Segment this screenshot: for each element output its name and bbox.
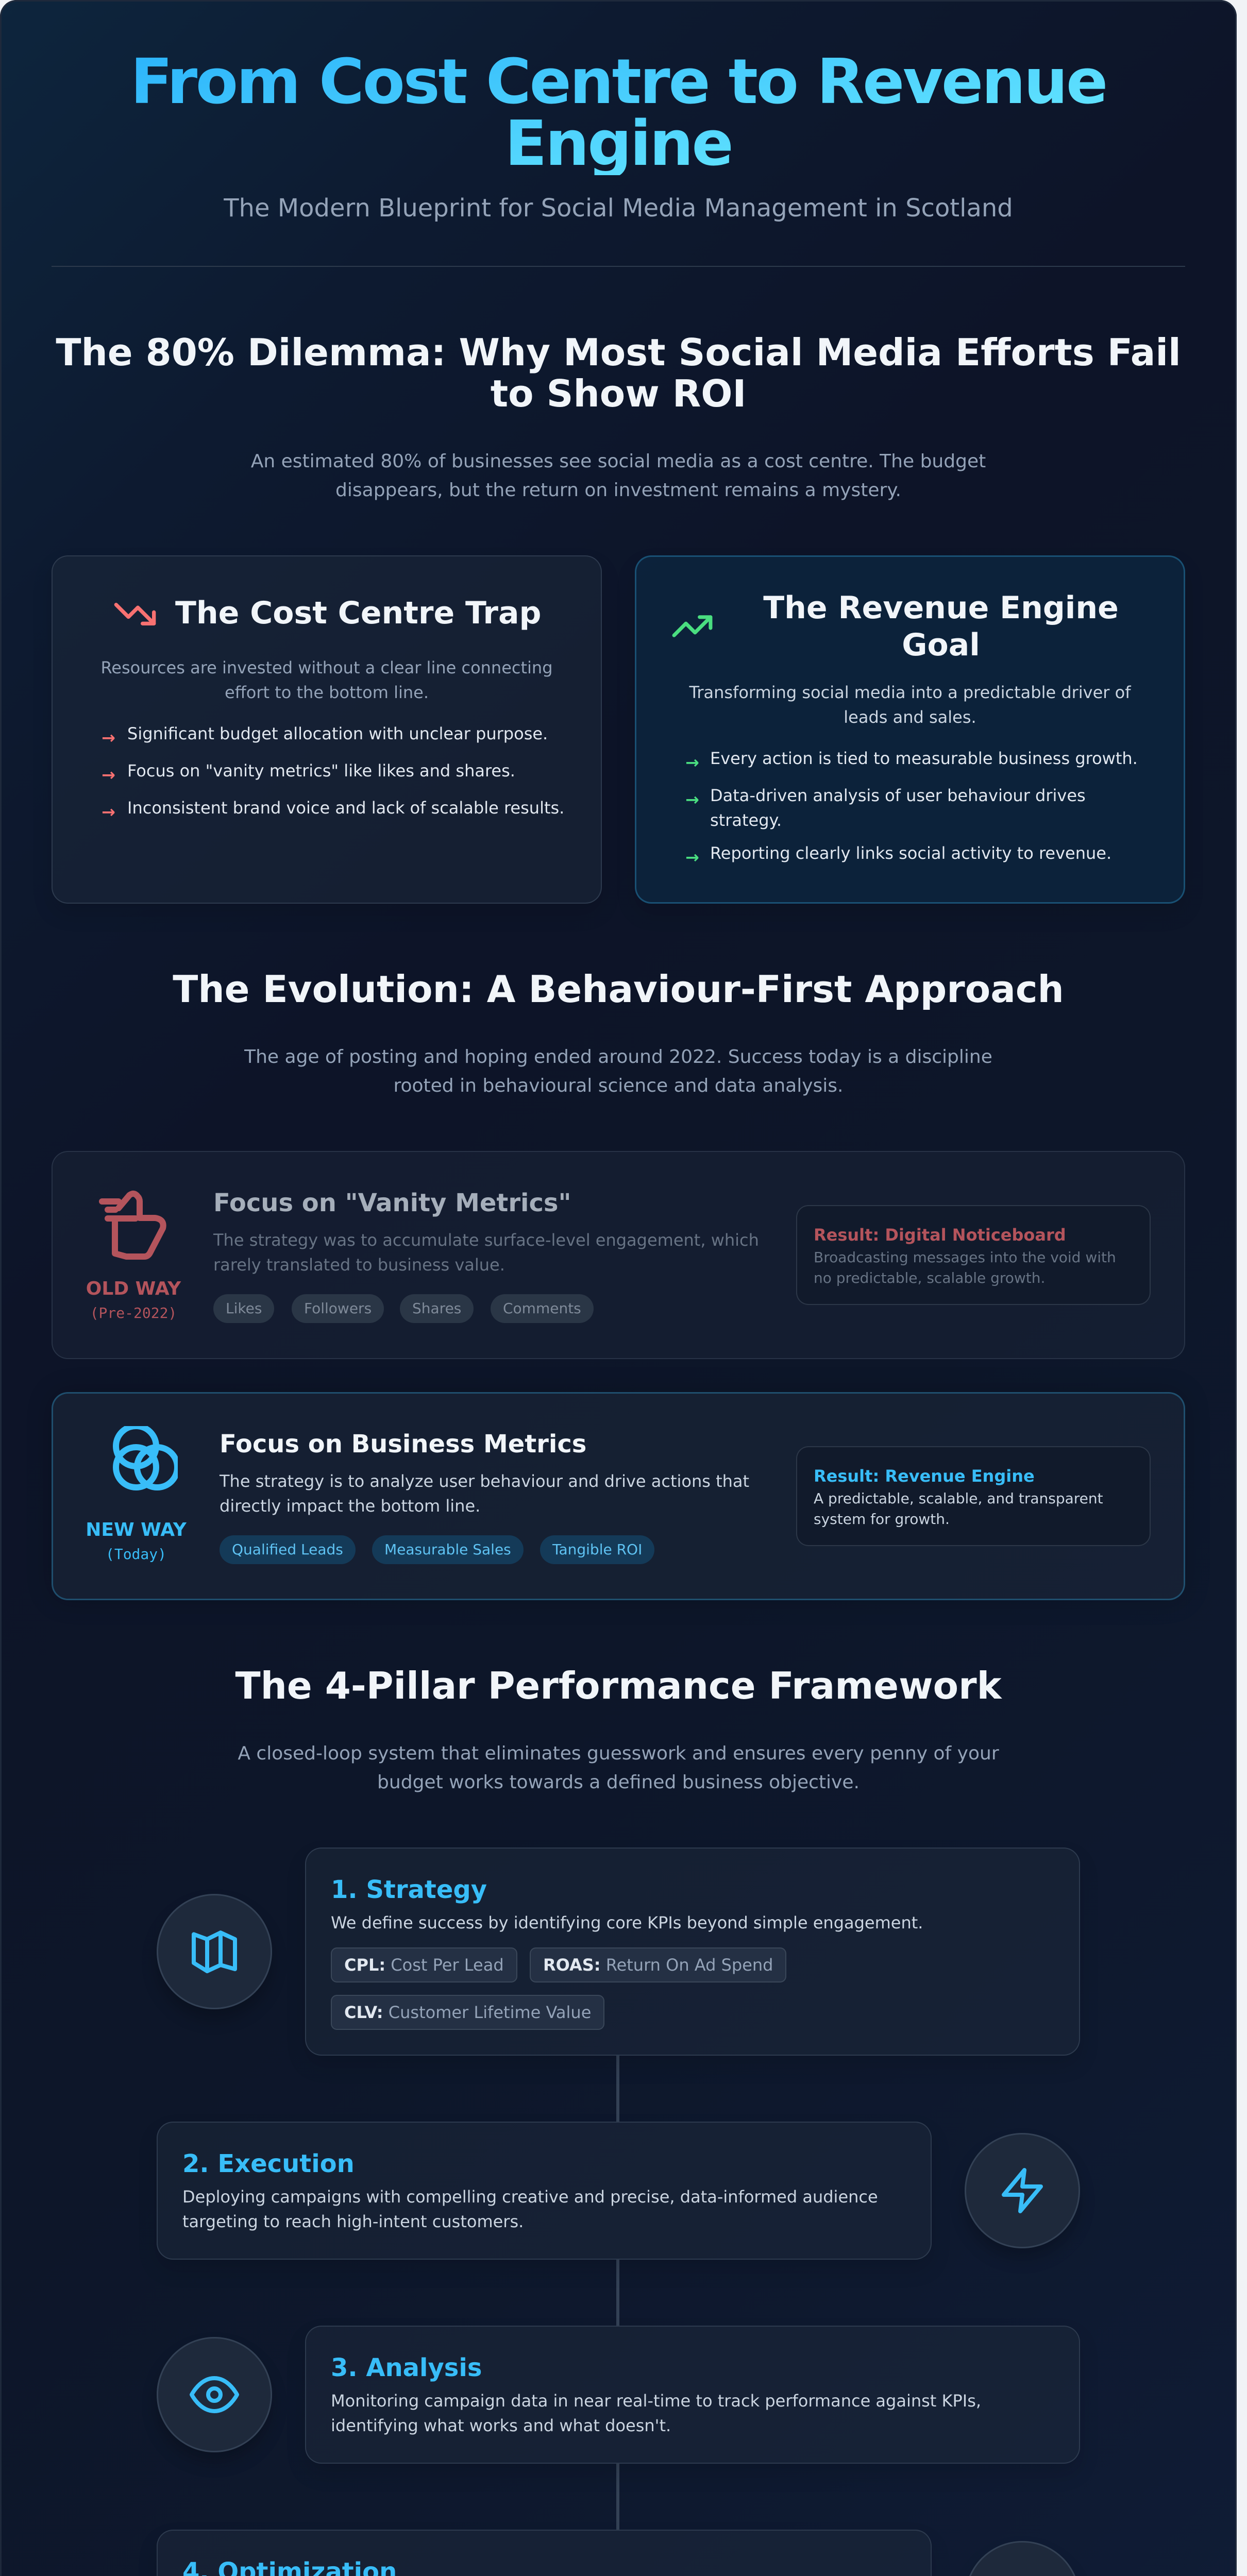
description bbox=[689, 683, 1132, 727]
tags: business metrics: Measurable Sales bbox=[384, 1541, 511, 1558]
heading: strategy: 1. Strategy bbox=[331, 1875, 487, 1904]
icon: thumbs up bbox=[99, 1190, 166, 1260]
tags: vanity metrics: Shares bbox=[412, 1300, 461, 1317]
intro text: framework: budget works towards a defined business objective. bbox=[377, 1772, 860, 1793]
intro text: the 80% dilemma bbox=[251, 451, 986, 501]
tags: vanity metrics: Likes bbox=[226, 1300, 262, 1317]
heading: execution: 2. Execution bbox=[182, 2149, 355, 2178]
heading: the revenue engine goal bbox=[763, 590, 1119, 663]
list: cost centre problems: Significant budget allocation with unclear purpose. bbox=[127, 724, 548, 743]
icon: lightning bolt bbox=[965, 2133, 1080, 2248]
chip: ROAS bbox=[530, 1947, 786, 1982]
intro text: the 80% dilemma: disappears, but the return on investment remains a mystery. bbox=[335, 480, 901, 501]
heading: the 80% dilemma: to Show ROI bbox=[491, 372, 746, 415]
description bbox=[182, 2187, 878, 2231]
list: revenue engine benefits: Reporting clearly links social activity to revenue. bbox=[710, 843, 1111, 863]
intro text: framework: A closed-loop system that eliminates guesswork and ensures every penny of your bbox=[238, 1743, 999, 1764]
intro text: the evolution: rooted in behavioural science and data analysis. bbox=[393, 1075, 844, 1096]
panel: optimization bbox=[157, 2530, 932, 2576]
icon: trending down bbox=[114, 603, 156, 625]
description: effort to the bottom line. bbox=[225, 683, 429, 702]
list: cost centre problems: → bbox=[102, 765, 115, 785]
callout: digital noticeboard: Result: Digital Noticeboard bbox=[814, 1225, 1066, 1245]
callout: digital noticeboard: Broadcasting messages into the void with bbox=[814, 1249, 1116, 1266]
chip: CPL bbox=[331, 1947, 517, 1982]
heading: the cost centre trap: The Cost Centre Trap bbox=[175, 595, 541, 631]
description: identifying what works and what doesn't. bbox=[331, 2416, 671, 2435]
description: leads and sales. bbox=[844, 707, 976, 727]
callout: revenue engine: system for growth. bbox=[814, 1511, 950, 1528]
chip: CLV bbox=[331, 1995, 604, 2030]
icon: gear bbox=[965, 2541, 1080, 2576]
list: cost centre problems bbox=[102, 724, 564, 822]
description: Resources are invested without a clear line connecting bbox=[100, 658, 553, 677]
heading: the 80% dilemma: The 80% Dilemma: Why Most Social Media Efforts Fail bbox=[56, 331, 1181, 374]
icon: overlapping circles bbox=[113, 1426, 178, 1490]
description: The strategy was to accumulate surface-level engagement, which bbox=[213, 1230, 759, 1250]
list: revenue engine benefits: Every action is tied to measurable business growth. bbox=[710, 749, 1138, 768]
chip: CPL: CPL: Cost Per Lead bbox=[344, 1955, 504, 1975]
list: revenue engine benefits: → bbox=[685, 790, 699, 809]
list: revenue engine benefits: Data-driven analysis of user behaviour drives bbox=[710, 786, 1086, 805]
heading: vanity metrics: Focus on "Vanity Metrics" bbox=[213, 1189, 571, 1217]
panel: analysis bbox=[305, 2326, 1080, 2464]
description bbox=[100, 658, 553, 702]
list: cost centre problems: → bbox=[102, 728, 115, 748]
icon: eye bbox=[157, 2337, 272, 2452]
description: targeting to reach high-intent customers. bbox=[182, 2212, 524, 2231]
title: From Cost Centre to Revenue bbox=[130, 46, 1106, 118]
chip: ROAS: ROAS: Return On Ad Spend bbox=[543, 1955, 773, 1975]
panel: execution bbox=[157, 2122, 932, 2260]
tags: business metrics: Qualified Leads bbox=[232, 1541, 343, 1558]
callout: digital noticeboard bbox=[796, 1205, 1151, 1305]
description: Monitoring campaign data in near real-time to track performance against KPIs, bbox=[331, 2391, 981, 2411]
heading: the evolution: The Evolution: A Behaviour-First Approach bbox=[173, 968, 1064, 1011]
heading: the revenue engine goal: The Revenue Engine bbox=[763, 590, 1119, 626]
list: cost centre problems: Inconsistent brand voice and lack of scalable results. bbox=[127, 798, 564, 818]
icon: trending up bbox=[672, 615, 712, 637]
title bbox=[52, 52, 1185, 175]
intro text: the evolution: The age of posting and hoping ended around 2022. Success today is a discipline bbox=[244, 1046, 992, 1067]
tags: vanity metrics bbox=[213, 1294, 594, 1323]
tags: business metrics: Tangible ROI bbox=[552, 1541, 642, 1558]
description: Transforming social media into a predictable driver of bbox=[689, 683, 1131, 702]
callout: revenue engine: A predictable, scalable, and transparent bbox=[814, 1490, 1103, 1507]
description bbox=[220, 1471, 749, 1516]
description: Deploying campaigns with compelling creative and precise, data-informed audience bbox=[182, 2187, 878, 2207]
description bbox=[213, 1230, 759, 1275]
tags: vanity metrics: Followers bbox=[304, 1300, 372, 1317]
panel: strategy bbox=[305, 1848, 1080, 2056]
label: new way: NEW WAY bbox=[86, 1519, 187, 1540]
label: old way: OLD WAY bbox=[86, 1278, 181, 1299]
intro text: the evolution bbox=[244, 1046, 992, 1096]
callout: revenue engine: Result: Revenue Engine bbox=[814, 1466, 1035, 1486]
list: cost centre problems: → bbox=[102, 802, 115, 822]
panel: old way bbox=[52, 1151, 1185, 1359]
label: today: (Today) bbox=[106, 1546, 166, 1563]
description: rarely translated to business value. bbox=[213, 1255, 505, 1275]
heading: the revenue engine goal: Goal bbox=[902, 627, 980, 663]
list: revenue engine benefits bbox=[685, 749, 1138, 867]
title: Engine bbox=[505, 108, 732, 180]
list: cost centre problems: Focus on "vanity metrics" like likes and shares. bbox=[127, 761, 515, 781]
panel: revenue engine goal bbox=[635, 555, 1185, 904]
description: We define success by identifying core KPIs beyond simple engagement. bbox=[331, 1913, 923, 1933]
list: revenue engine benefits: → bbox=[685, 848, 699, 867]
callout: digital noticeboard: no predictable, scalable growth. bbox=[814, 1269, 1045, 1286]
label: pre-2022: (Pre-2022) bbox=[90, 1304, 177, 1321]
tags: business metrics bbox=[220, 1535, 654, 1564]
heading: analysis: 3. Analysis bbox=[331, 2353, 482, 2382]
heading: 4-pillar framework: The 4-Pillar Performance Framework bbox=[235, 1664, 1001, 1707]
list: revenue engine benefits: → bbox=[685, 753, 699, 772]
intro text: framework bbox=[238, 1743, 999, 1793]
chip: CLV: CLV: Customer Lifetime Value bbox=[344, 2003, 591, 2022]
description: directly impact the bottom line. bbox=[220, 1496, 480, 1516]
heading: the 80% dilemma bbox=[56, 331, 1181, 415]
description bbox=[331, 2388, 981, 2438]
description: The strategy is to analyze user behaviour and drive actions that bbox=[220, 1471, 749, 1491]
panel: cost centre trap bbox=[52, 555, 602, 904]
panel: new way bbox=[52, 1392, 1185, 1600]
icon: map bbox=[157, 1894, 272, 2009]
callout: revenue engine bbox=[796, 1446, 1151, 1546]
list: revenue engine benefits: strategy. bbox=[710, 810, 782, 830]
tags: vanity metrics: Comments bbox=[503, 1300, 581, 1317]
heading: business metrics: Focus on Business Metrics bbox=[220, 1430, 586, 1459]
intro text: the 80% dilemma: An estimated 80% of businesses see social media as a cost centre. The budget bbox=[251, 451, 986, 472]
subtitle: The Modern Blueprint for Social Media Management in Scotland bbox=[224, 194, 1013, 223]
